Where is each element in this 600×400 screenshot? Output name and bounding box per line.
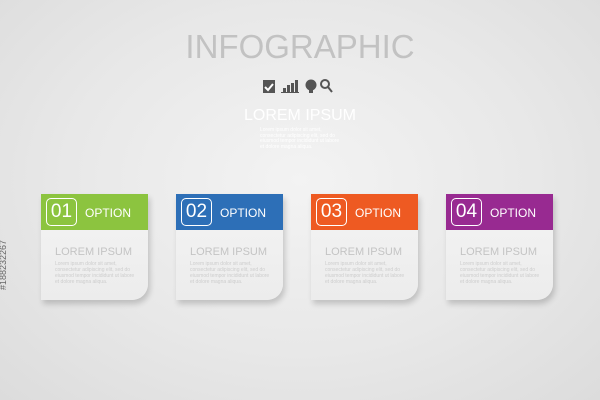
- text: Lorem ipsum dolor sit amet, consectetur adipiscing elit, sed do eiusmod tempor incididunt ut labore et dolore magna aliqua.: [460, 261, 539, 285]
- header 04: [446, 194, 553, 230]
- panel: option 01: [41, 194, 148, 300]
- icons row: [263, 79, 333, 93]
- panel: option 04: [446, 194, 553, 300]
- panel: option 03: [311, 194, 418, 300]
- header 01: 01: [51, 201, 72, 222]
- header 02: [176, 194, 283, 230]
- header 02: OPTION: [220, 206, 266, 220]
- icon: search: [321, 80, 332, 92]
- header 04: OPTION: [490, 206, 536, 220]
- heading: LOREM IPSUM: [325, 246, 402, 258]
- text: Lorem ipsum dolor sit amet, consectetur adipiscing elit, sed do eiusmod tempor incididunt ut labore et dolore magna aliqua.: [325, 261, 404, 285]
- panel: option 02: [176, 194, 283, 300]
- icon: clipboard check: [263, 80, 275, 93]
- heading: LOREM IPSUM: [190, 246, 267, 258]
- icon: bulb: [306, 80, 316, 93]
- header 02: 02: [186, 201, 207, 222]
- text: Lorem ipsum dolor sit amet, consectetur adipiscing elit, sed do eiusmod tempor incididunt ut labore et dolore magna aliqua.: [190, 261, 269, 285]
- heading: LOREM IPSUM: [460, 246, 537, 258]
- heading: LOREM IPSUM: [55, 246, 132, 258]
- icon: bar chart: [281, 80, 299, 93]
- header 03: OPTION: [355, 206, 401, 220]
- header 01: OPTION: [85, 206, 131, 220]
- header 03: [311, 194, 418, 230]
- header 01: [41, 194, 148, 230]
- header 04: 04: [456, 201, 477, 222]
- header 03: 03: [321, 201, 342, 222]
- body text: Lorem ipsum dolor sit amet, consectetur adipiscing elit, sed do eiusmod tempor incididunt ut labore et dolore magna aliqua.: [260, 127, 339, 150]
- subtitle: LOREM IPSUM: [244, 107, 356, 124]
- text: Lorem ipsum dolor sit amet, consectetur adipiscing elit, sed do eiusmod tempor incididunt ut labore et dolore magna aliqua.: [55, 261, 134, 285]
- title: INFOGRAPHIC: [185, 28, 415, 65]
